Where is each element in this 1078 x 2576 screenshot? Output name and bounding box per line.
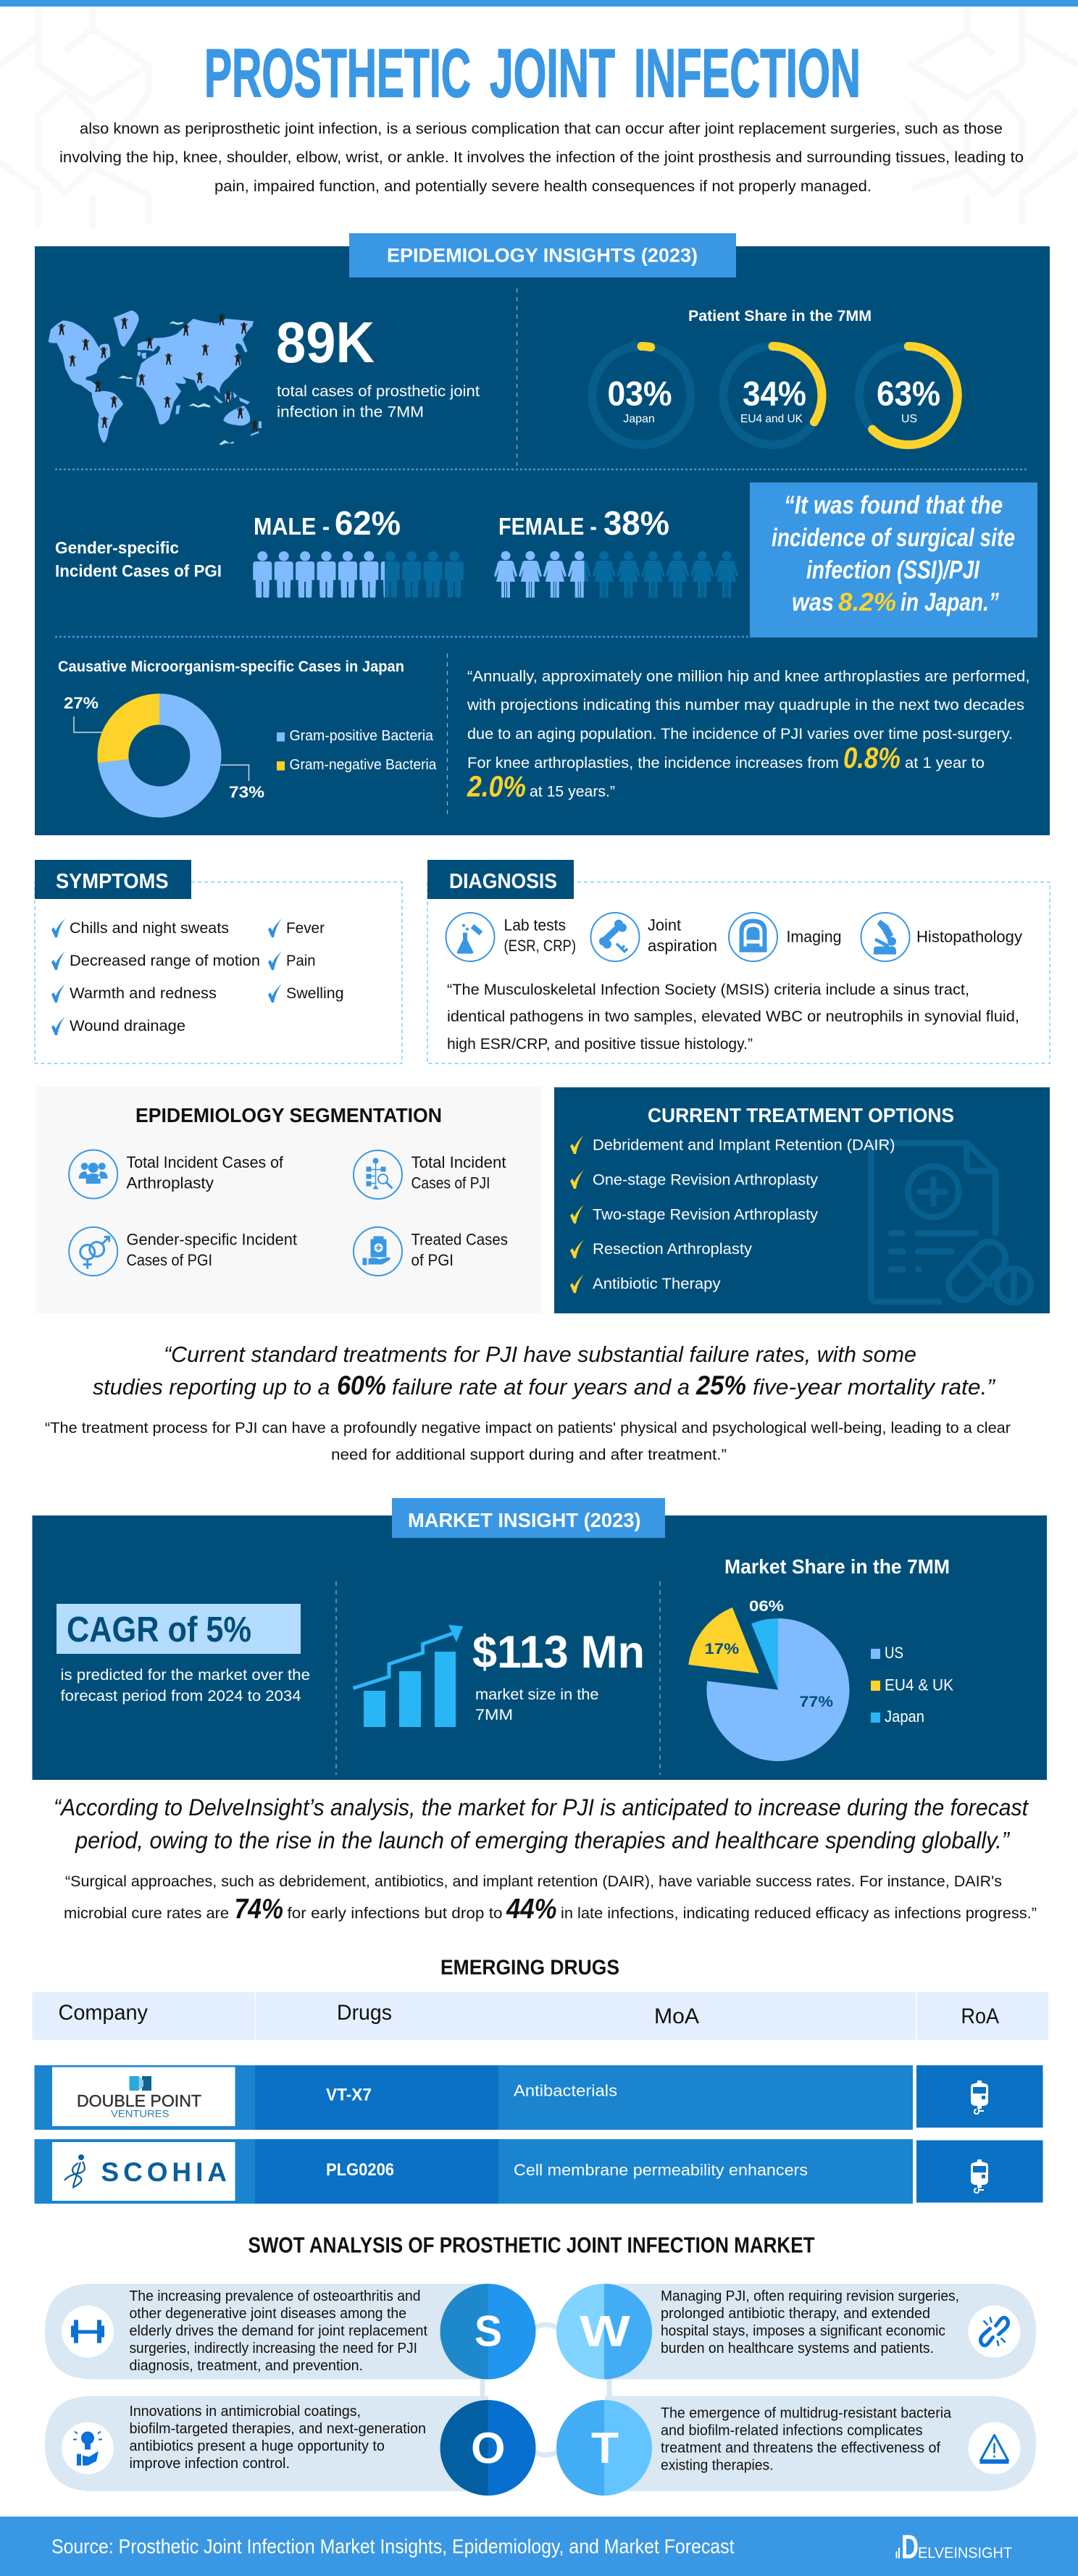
text block: treatment impact: need for additional support during and after treatment.” — [331, 1447, 727, 1463]
strength text: surgeries, indirectly increasing the need for PJI — [129, 2341, 417, 2357]
ring chart: Japan 03%: Japan — [623, 413, 655, 425]
text block: DAIR cure rates: for early infections but drop to — [287, 1905, 503, 1922]
icon: medkit in hand — [354, 1227, 402, 1276]
quote: DelveInsight analysis — [54, 1794, 1029, 1853]
icon: lab flask — [446, 913, 494, 961]
banner heading — [392, 1498, 665, 1538]
legend: market share: EU4 & UK — [885, 1676, 953, 1694]
strength text: elderly drives the demand for joint replacement — [129, 2323, 427, 2339]
item text: Cases of PJI — [411, 1174, 490, 1192]
callout: CAGR: forecast period from 2024 to 2034 — [61, 1688, 301, 1705]
S circle — [440, 2283, 536, 2379]
heading: gender-specific — [55, 538, 222, 580]
item text: Total Incident — [411, 1153, 506, 1171]
symptom list: Pain — [286, 953, 316, 969]
icon: broken link — [968, 2305, 1020, 2357]
stat: market size: market size in the — [475, 1686, 598, 1703]
callout: CAGR: CAGR of 5% — [67, 1610, 251, 1649]
treatment list: Resection Arthroplasty — [593, 1241, 753, 1258]
item text: Arthroplasty — [126, 1174, 214, 1192]
icon: prescription watermark — [871, 1143, 1031, 1302]
strength text: diagnosis, treatment, and prevention. — [129, 2358, 363, 2374]
stat: market size: 7MM — [475, 1707, 513, 1723]
item text — [411, 1153, 506, 1192]
text block: treatment impact: “The treatment process for PJI can have a profoundly negative impact on patients' physical and psychological well-being, leading to a clear — [45, 1420, 1011, 1437]
background hex pattern left — [0, 7, 149, 228]
table header: MoA — [654, 2004, 699, 2028]
callout: CAGR: is predicted for the market over the — [61, 1667, 310, 1684]
panel: diagnosis — [427, 860, 1050, 1063]
treatment list: Debridement and Implant Retention (DAIR) — [593, 1137, 895, 1153]
strength text: other degenerative joint diseases among the — [129, 2306, 406, 2322]
S circle: S — [475, 2307, 502, 2356]
banner heading — [349, 233, 736, 277]
callout: SSI incidence: 8.2% — [838, 588, 896, 616]
diagnosis labels: Histopathology — [916, 927, 1022, 946]
quote: failure rates: failure rate at four years and a — [392, 1374, 690, 1400]
pie chart: market share: 06% — [749, 1598, 784, 1615]
item text — [126, 1153, 284, 1192]
panel: strengths — [45, 2283, 536, 2379]
table header: Company — [58, 2001, 148, 2025]
item text — [126, 1230, 297, 1269]
legend: bacteria: Gram-positive Bacteria — [290, 728, 434, 744]
symptom list: Warmth and redness — [70, 985, 217, 1002]
text block: annual arthroplasties: at 1 year to — [905, 755, 985, 771]
panel: epidemiology segmentation — [36, 1087, 541, 1313]
quote: failure rates: 60% — [337, 1371, 386, 1400]
ring chart: EU4 and UK 34%: 34% — [743, 374, 806, 413]
W circle: W — [580, 2307, 630, 2356]
logo: DelveInsight — [895, 2528, 1012, 2566]
pie chart: market share: 77% — [800, 1694, 833, 1710]
icon: IV bag — [971, 2081, 988, 2114]
table header: Drugs — [337, 2001, 392, 2025]
banner heading: MARKET INSIGHT (2023) — [408, 1509, 640, 1531]
stat: female 38% — [498, 504, 669, 542]
opportunity text: Innovations in antimicrobial coatings, — [129, 2404, 361, 2420]
icon: gender symbols — [69, 1227, 117, 1276]
ring chart: EU4 and UK 34% — [723, 346, 822, 445]
icon: people — [69, 1150, 117, 1198]
connectors between SWOT circles — [482, 2325, 609, 2455]
pie chart: market share: 17% — [705, 1641, 740, 1657]
symptom list: Fever — [286, 920, 325, 937]
callout: CAGR — [57, 1604, 310, 1705]
world map — [49, 310, 262, 445]
text block: DAIR cure rates: 74% — [235, 1894, 283, 1925]
heading: causative microorganism: Causative Microorganism-specific Cases in Japan — [58, 658, 404, 675]
panel: epidemiology insights — [35, 233, 1050, 835]
diagnosis labels: Lab tests — [504, 916, 566, 934]
treatment list: Antibiotic Therapy — [593, 1276, 721, 1292]
pictogram: female — [494, 551, 738, 598]
text block: MSIS criteria: high ESR/CRP, and positive tissue histology.” — [447, 1036, 753, 1053]
ring chart: EU4 and UK 34%: EU4 and UK — [740, 413, 803, 425]
donut chart — [64, 693, 264, 817]
callout: SSI incidence: “It was found that the — [784, 491, 1003, 519]
ring chart: US 63% — [859, 346, 958, 445]
text block: annual arthroplasties: “Annually, approximately one million hip and knee arthroplasties are performed, — [467, 668, 1030, 685]
weakness text: Managing PJI, often requiring revision surgeries, — [661, 2288, 959, 2304]
table row: Double Point Ventures: Antibacterials — [514, 2082, 617, 2099]
text block: DAIR cure rates — [64, 1873, 1037, 1925]
panel: opportunities — [45, 2396, 536, 2496]
source text: Source: Prosthetic Joint Infection Market Insights, Epidemiology, and Market Forecast — [51, 2535, 735, 2557]
item text: of PGI — [411, 1251, 454, 1269]
icon: microscope — [861, 913, 910, 961]
title: PROSTHETIC — [204, 35, 471, 112]
legend: market share: US — [885, 1644, 903, 1662]
quote: DelveInsight analysis: “According to DelveInsight’s analysis, the market for PJI is anticipated to increase during the forecast — [54, 1794, 1029, 1820]
legend: bacteria: Gram-negative Bacteria — [290, 757, 437, 773]
stat: 89K total cases: infection in the 7MM — [277, 404, 424, 420]
quote: failure rates — [93, 1342, 996, 1400]
icon: joint aspiration — [591, 913, 639, 961]
diagnosis labels: Joint — [648, 916, 681, 934]
title: JOINT — [490, 35, 615, 112]
icon: IV bag — [971, 2159, 988, 2193]
stat: 89K total cases: total cases of prosthetic joint — [277, 383, 480, 400]
text block: annual arthroplasties — [467, 668, 1030, 803]
table row: Double Point Ventures: VT-X7 — [326, 2085, 372, 2105]
text block: DAIR cure rates: in late infections, indicating reduced efficacy as infections progress.” — [561, 1905, 1037, 1922]
treatment list — [570, 1135, 895, 1293]
intro text: pain, impaired function, and potentially severe health consequences if not properly managed. — [214, 178, 872, 195]
donut chart: 73% — [229, 783, 264, 801]
logo: Double Point Ventures: VENTURES — [111, 2108, 170, 2120]
text block: annual arthroplasties: due to an aging population. The incidence of PJI varies over time post-surgery. — [467, 726, 1013, 743]
item text: Cases of PGI — [126, 1251, 212, 1269]
icon: idea in hand — [62, 2422, 114, 2475]
stat: 89K total cases — [276, 310, 480, 420]
legend: market share — [871, 1644, 953, 1726]
callout: SSI incidence: in Japan.” — [901, 588, 999, 616]
text block: annual arthroplasties: For knee arthroplasties, the incidence increases from — [467, 755, 839, 771]
heading: SWOT: SWOT ANALYSIS OF PROSTHETIC JOINT INFECTION MARKET — [248, 2233, 815, 2257]
text block: treatment impact — [45, 1420, 1011, 1463]
table header — [32, 1991, 1048, 2040]
text block: annual arthroplasties: 0.8% — [843, 741, 901, 774]
tab heading: DIAGNOSIS — [449, 870, 557, 893]
panel: market insight — [32, 1498, 1047, 1780]
symptom list — [51, 919, 343, 1035]
title — [204, 35, 861, 112]
symptom list: Chills and night sweats — [70, 920, 229, 937]
threat text: and biofilm-related infections complicates — [661, 2422, 923, 2438]
treatment list: Two-stage Revision Arthroplasty — [593, 1207, 819, 1223]
diagnosis labels — [504, 916, 1022, 955]
strength text: The increasing prevalence of osteoarthritis and — [129, 2288, 420, 2304]
item text: Gender-specific Incident — [126, 1230, 297, 1249]
tab heading — [35, 860, 191, 899]
stat: male 62%: 62% — [335, 504, 401, 542]
weakness text: burden on healthcare systems and patients. — [661, 2341, 934, 2357]
text block: DAIR cure rates: microbial cure rates are — [64, 1905, 229, 1922]
panel: current treatment options — [554, 1087, 1050, 1313]
threat text: existing therapies. — [661, 2457, 774, 2473]
donut chart: 27% — [64, 694, 99, 712]
table row: Scohia: Cell membrane permeability enhancers — [514, 2161, 808, 2179]
O circle: O — [471, 2424, 506, 2472]
text block: DAIR cure rates: 44% — [506, 1894, 556, 1925]
opportunity text — [129, 2404, 426, 2472]
table header: RoA — [961, 2004, 999, 2028]
symptom list: Swelling — [286, 985, 343, 1002]
pictogram: male — [253, 551, 464, 598]
item text — [411, 1230, 508, 1269]
stat: market size: $113 Mn — [472, 1627, 645, 1678]
panel: symptoms — [35, 860, 402, 1063]
logo: Scohia: SCOHIA — [101, 2157, 227, 2187]
item text: Total Incident Cases of — [126, 1153, 284, 1171]
logo: Scohia — [52, 2142, 235, 2201]
diagnosis labels: Imaging — [787, 927, 842, 946]
intro text: involving the hip, knee, shoulder, elbow, wrist, or ankle. It involves the infection of the joint prosthesis and surrounding tissues, leading to — [59, 149, 1024, 166]
item text: Treated Cases — [411, 1230, 508, 1249]
heading: market share: Market Share in the 7MM — [724, 1555, 950, 1578]
banner heading: EPIDEMIOLOGY INSIGHTS (2023) — [387, 245, 698, 267]
opportunity text: antibiotics present a huge opportunity to — [129, 2438, 385, 2454]
heading: gender-specific: Incident Cases of PGI — [55, 561, 222, 580]
text block: MSIS criteria: identical pathogens in two samples, elevated WBC or neutrophils in synovial fluid, — [447, 1008, 1019, 1025]
threat text: treatment and threatens the effectiveness of — [661, 2440, 940, 2456]
icon: flowchart search — [354, 1150, 402, 1199]
text block: annual arthroplasties: at 15 years.” — [530, 784, 615, 800]
text block: MSIS criteria: “The Musculoskeletal Infection Society (MSIS) criteria include a sinus tract, — [447, 982, 969, 998]
quote: failure rates: studies reporting up to a — [93, 1374, 330, 1400]
quote: failure rates: 25% — [695, 1371, 746, 1400]
callout: SSI incidence: infection (SSI)/PJI — [806, 556, 980, 584]
table row: Scohia: PLG0206 — [326, 2160, 394, 2180]
text block: annual arthroplasties: with projections indicating this number may quadruple in the next two decades — [467, 697, 1024, 714]
stat: market size — [472, 1627, 645, 1723]
heading: patient share: Patient Share in the 7MM — [688, 308, 872, 325]
text block: MSIS criteria — [447, 982, 1019, 1053]
top bar — [0, 0, 1078, 7]
callout: SSI incidence: was — [792, 588, 834, 616]
opportunity text: improve infection control. — [129, 2456, 290, 2472]
legend: bacteria — [277, 728, 437, 773]
logo: Double Point Ventures: DOUBLE POINT — [77, 2091, 201, 2110]
diagnosis labels: aspiration — [648, 937, 717, 955]
logo: DelveInsight: ELVEINSIGHT — [918, 2545, 1012, 2562]
pie chart: market share — [688, 1598, 849, 1761]
panel: weaknesses — [556, 2283, 1036, 2379]
legend: market share: Japan — [885, 1707, 924, 1726]
text block: DAIR cure rates: “Surgical approaches, such as debridement, antibiotics, and implant retention (DAIR), have variable success rates. For instance, DAIR's — [65, 1873, 1002, 1890]
title: INFECTION — [634, 35, 861, 112]
table row: Scohia — [35, 2139, 1043, 2204]
table row: Double Point Ventures — [35, 2065, 1043, 2130]
ring chart: US 63%: US — [901, 413, 917, 425]
intro text: also known as periprosthetic joint infection, is a serious complication that can occur after joint replacement surgeries, such as those — [80, 120, 1003, 138]
stat: female 38%: 38% — [603, 504, 669, 542]
icon: imaging scanner — [729, 913, 777, 961]
intro text — [59, 120, 1024, 195]
weakness text: prolonged antibiotic therapy, and extended — [661, 2306, 930, 2322]
stat: 89K total cases: 89K — [276, 310, 375, 375]
threat text — [661, 2405, 952, 2473]
treatment list: One-stage Revision Arthroplasty — [593, 1172, 819, 1188]
chart icon: rising bars and arrow — [353, 1625, 463, 1727]
symptom list: Decreased range of motion — [70, 953, 260, 969]
heading: emerging drugs: EMERGING DRUGS — [440, 1956, 619, 1979]
ring chart: US 63%: 63% — [877, 374, 940, 413]
quote: failure rates: five-year mortality rate.” — [753, 1374, 996, 1400]
icon: dumbbell — [62, 2305, 114, 2357]
strength text — [129, 2288, 427, 2374]
stat: female 38%: FEMALE - — [498, 513, 597, 540]
quote: DelveInsight analysis: period, owing to the rise in the launch of emerging therapies and healthcare spending globally.” — [75, 1827, 1010, 1853]
O circle — [440, 2400, 536, 2496]
logo: DelveInsight: D — [901, 2528, 919, 2566]
heading: gender-specific: Gender-specific — [55, 538, 179, 557]
panel: threats — [556, 2396, 1036, 2496]
callout: SSI incidence — [750, 482, 1037, 637]
stat: male 62%: MALE - — [254, 513, 330, 540]
weakness text: hospital stays, imposes a significant economic — [661, 2323, 945, 2339]
logo: Double Point Ventures — [52, 2067, 235, 2126]
icon: warning triangle — [968, 2422, 1020, 2475]
heading: CURRENT TREATMENT OPTIONS — [648, 1104, 954, 1126]
ring chart: Japan 03%: 03% — [607, 374, 672, 413]
ring chart: Japan 03% — [593, 346, 691, 445]
threat text: The emergence of multidrug-resistant bacteria — [661, 2405, 952, 2421]
diagnosis labels: (ESR, CRP) — [504, 937, 576, 955]
heading: EPIDEMIOLOGY SEGMENTATION — [135, 1104, 442, 1126]
footer — [0, 2517, 1078, 2576]
background hex pattern right — [911, 7, 1078, 225]
tab heading — [427, 860, 574, 899]
T circle — [556, 2400, 652, 2496]
callout: SSI incidence: incidence of surgical site — [772, 524, 1015, 552]
T circle: T — [591, 2424, 619, 2472]
tab heading: SYMPTOMS — [56, 870, 168, 893]
symptom list: Wound drainage — [70, 1018, 185, 1034]
W circle — [556, 2283, 652, 2379]
quote: failure rates: “Current standard treatments for PJI have substantial failure rates, with some — [164, 1342, 916, 1367]
opportunity text: biofilm-targeted therapies, and next-generation — [129, 2421, 426, 2437]
stat: male 62% — [254, 504, 401, 542]
weakness text — [661, 2288, 959, 2357]
text block: annual arthroplasties: 2.0% — [467, 769, 526, 803]
